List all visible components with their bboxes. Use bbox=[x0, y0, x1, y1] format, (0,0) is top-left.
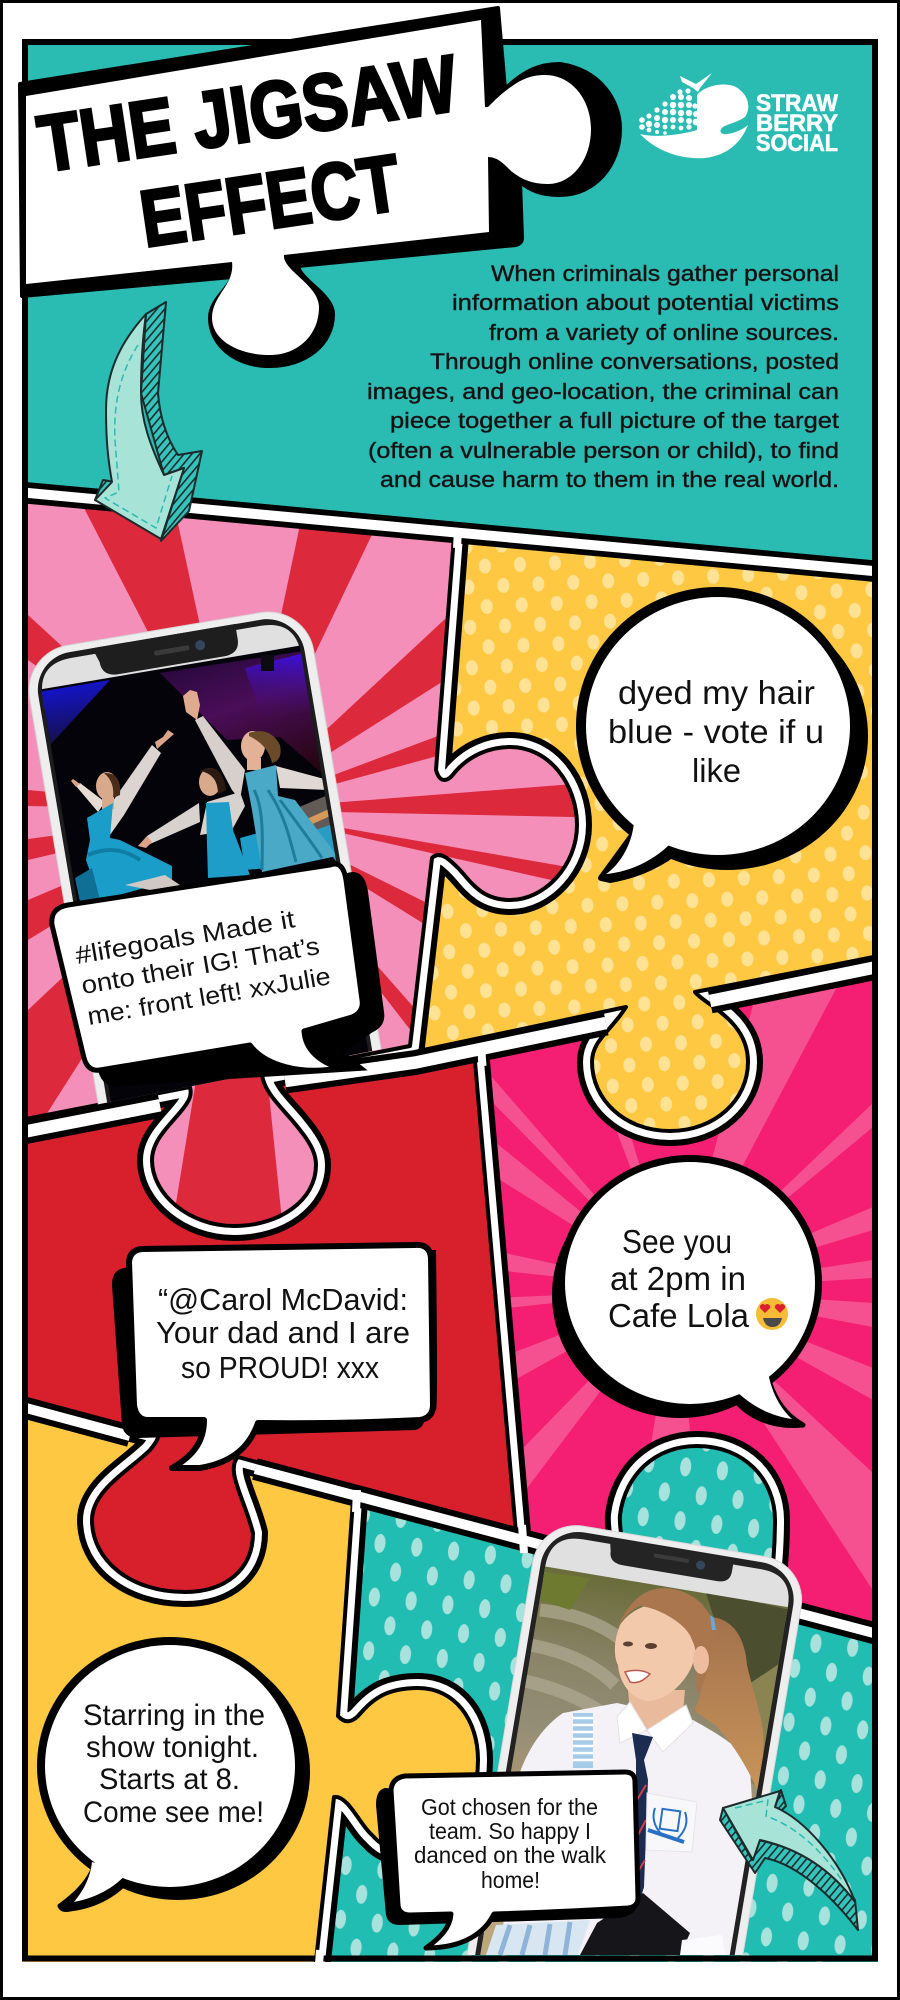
speech bubble: starring in the show bbox=[37, 1637, 310, 1910]
speech bubble: lifegoals: me: front left! xxJulie bbox=[85, 962, 333, 1031]
speech bubble: got chosen: danced on the walk bbox=[414, 1842, 606, 1868]
speech bubble: Carol McDavid: so PROUD! xxx bbox=[181, 1350, 379, 1385]
arrow: teal pointing down bbox=[95, 302, 202, 541]
icon: heart-eyes emoji bbox=[756, 1298, 788, 1330]
speech bubble: see you at 2pm: Cafe Lola bbox=[608, 1297, 750, 1334]
speech bubble: see you at 2pm: See you bbox=[622, 1223, 732, 1260]
speech bubble: Carol McDavid: “@Carol McDavid: bbox=[158, 1282, 408, 1317]
panel: pink sunburst piece bbox=[28, 504, 592, 1241]
intro text block: When criminals gather personal bbox=[491, 261, 839, 286]
intro text block: images, and geo-location, the criminal can bbox=[367, 379, 839, 404]
dancer middle bbox=[138, 768, 268, 878]
intro text block: piece together a full picture of the target bbox=[390, 408, 839, 433]
panel: teal polka-dot piece bbox=[300, 1446, 900, 1970]
intro text block: information about potential victims bbox=[452, 290, 839, 315]
logo: Strawberry Social: SOCIAL bbox=[756, 130, 838, 157]
dancer left bbox=[71, 730, 180, 902]
speech bubble: lifegoals: #lifegoals Made it bbox=[73, 905, 297, 970]
speech bubble: dyed my hair bbox=[576, 587, 868, 880]
speech bubble: dyed my hair: dyed my hair bbox=[618, 674, 815, 711]
phone with school photo bbox=[467, 1525, 802, 1955]
panel: red piece bbox=[0, 1050, 516, 1592]
speech bubble: see you at 2pm bbox=[552, 1155, 822, 1426]
panel: yellow lower-left piece bbox=[0, 1405, 478, 1970]
dance photo bbox=[38, 650, 345, 902]
logo: Strawberry Social: STRAW bbox=[756, 90, 838, 117]
speech bubble: see you at 2pm: at 2pm in bbox=[610, 1260, 746, 1297]
panel: yellow polka-dot piece bbox=[400, 505, 900, 1131]
panel: teal intro panel bbox=[0, 0, 900, 565]
arrow: teal pointing up-left bbox=[720, 1790, 858, 1930]
speech bubble: got chosen bbox=[376, 1772, 638, 1948]
logo: Strawberry Social bbox=[639, 73, 838, 158]
speech bubble: starring in the show: Starts at 8. bbox=[99, 1763, 240, 1796]
speech bubble: starring in the show: Come see me! bbox=[83, 1796, 264, 1829]
speech bubble: got chosen: home! bbox=[481, 1867, 540, 1893]
school photo bbox=[486, 1572, 790, 1955]
title text bbox=[32, 38, 463, 264]
speech bubble: lifegoals: onto their IG! That’s bbox=[79, 932, 322, 1000]
panel: magenta sunburst bbox=[490, 980, 872, 1622]
intro text block bbox=[367, 261, 839, 492]
speech bubble: dyed my hair: blue - vote if u bbox=[608, 713, 824, 750]
speech bubble: Carol McDavid: Your dad and I are bbox=[156, 1315, 410, 1350]
phone with dance photo bbox=[28, 612, 382, 1104]
intro text block: Through online conversations, posted bbox=[430, 349, 839, 374]
speech bubble: Carol McDavid bbox=[112, 1245, 437, 1468]
speech bubble: dyed my hair: like bbox=[692, 752, 741, 789]
title jigsaw piece bbox=[20, 8, 620, 366]
speech bubble: got chosen: team. So happy I bbox=[429, 1818, 591, 1844]
title text: THE JIGSAW bbox=[32, 38, 463, 189]
speech bubble: lifegoals bbox=[52, 864, 380, 1082]
intro text block: from a variety of online sources. bbox=[489, 320, 839, 345]
speech bubble: starring in the show: Starring in the bbox=[83, 1699, 265, 1732]
intro text block: and cause harm to them in the real world. bbox=[380, 467, 839, 492]
title text: EFFECT bbox=[134, 138, 406, 264]
intro text block: (often a vulnerable person or child), to find bbox=[368, 438, 839, 463]
far right figures bbox=[300, 796, 332, 835]
speech bubble: got chosen: Got chosen for the bbox=[421, 1794, 598, 1820]
speech bubble: starring in the show: show tonight. bbox=[86, 1731, 259, 1764]
icon: school crest bbox=[646, 1793, 697, 1852]
dancer right bbox=[183, 690, 337, 872]
logo: Strawberry Social: BERRY bbox=[756, 110, 838, 137]
